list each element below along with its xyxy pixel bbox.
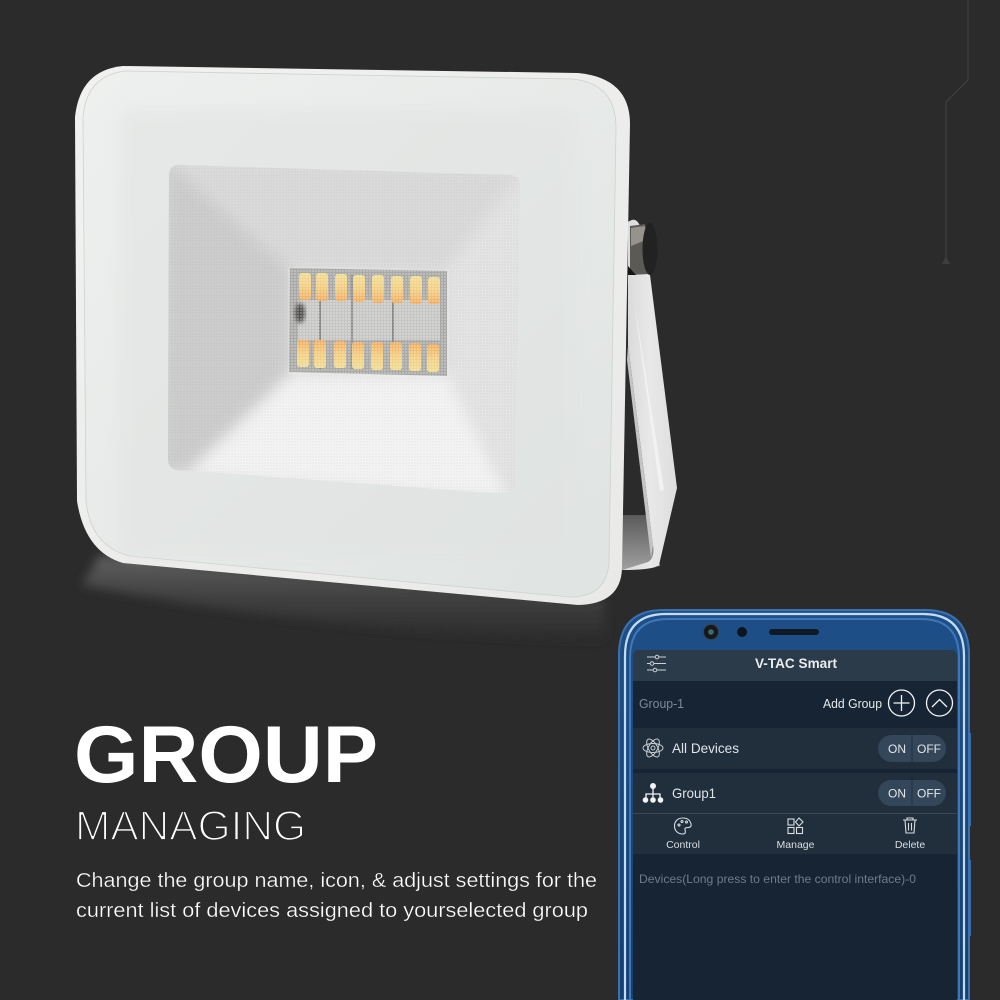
toggle bbox=[878, 735, 946, 762]
row: All Devices: All Devices bbox=[672, 740, 739, 756]
LED module bbox=[287, 266, 449, 378]
top LED row bbox=[299, 273, 440, 304]
toggle: ON bbox=[888, 742, 906, 756]
atom icon bbox=[643, 737, 663, 759]
add button bbox=[888, 690, 914, 716]
light window bbox=[160, 160, 525, 500]
frosted glass bbox=[83, 71, 616, 597]
right facet bbox=[447, 170, 525, 500]
group selector row bbox=[639, 690, 952, 716]
front camera bbox=[704, 624, 718, 640]
actions row: Delete bbox=[895, 839, 925, 851]
app title: V-TAC Smart bbox=[755, 656, 838, 671]
description text: current list of devices assigned to yourselected group bbox=[76, 900, 588, 922]
devices hint: Devices(Long press to enter the control interface)-0 bbox=[639, 872, 916, 886]
phone body bbox=[619, 610, 969, 1000]
description text bbox=[76, 870, 597, 922]
mounting bracket bbox=[622, 220, 677, 570]
app header bbox=[633, 650, 957, 681]
app screen bbox=[633, 650, 957, 1000]
bottom LED row bbox=[297, 340, 439, 372]
bolt bbox=[628, 223, 658, 275]
collapse button bbox=[926, 690, 952, 716]
toggle: OFF bbox=[917, 742, 941, 756]
floodlight lamp bbox=[75, 66, 677, 605]
LED mesh overlay bbox=[287, 266, 449, 378]
menu icon bbox=[647, 655, 666, 672]
subheading: MANAGING: MANAGING bbox=[75, 802, 306, 849]
toggle: OFF bbox=[917, 786, 941, 800]
phone edge highlight bbox=[625, 614, 964, 1000]
decorative circuit line bbox=[942, 0, 968, 264]
row: Group1 bbox=[633, 773, 957, 813]
actions row: Control bbox=[666, 839, 700, 851]
left facet bbox=[160, 160, 289, 470]
actions row bbox=[633, 813, 957, 854]
bottom facet bbox=[185, 375, 510, 500]
icon: manage grid bbox=[788, 818, 803, 834]
actions row: Manage bbox=[777, 839, 815, 851]
icon: trash bbox=[903, 818, 917, 833]
row: All Devices bbox=[633, 728, 957, 769]
phone inner edge bbox=[630, 619, 959, 1000]
toggle: ON bbox=[888, 786, 906, 800]
top facet bbox=[165, 160, 525, 268]
smartphone bbox=[619, 610, 971, 1000]
toggle bbox=[878, 780, 946, 806]
group selector row: Group-1 bbox=[639, 697, 684, 711]
icon: palette bbox=[674, 818, 691, 834]
description text: Change the group name, icon, & adjust settings for the bbox=[76, 870, 597, 892]
lamp frame bbox=[75, 66, 630, 605]
glass inner band bbox=[118, 108, 578, 558]
row: Group1: Group1 bbox=[672, 785, 716, 801]
floor reflection bbox=[82, 555, 605, 640]
speaker bbox=[769, 629, 819, 635]
phone side buttons bbox=[968, 733, 971, 936]
mesh texture bbox=[160, 160, 525, 500]
hierarchy icon bbox=[643, 783, 663, 803]
soft facets bbox=[168, 166, 506, 494]
group selector row: Add Group bbox=[823, 697, 882, 711]
heading: GROUP: GROUP bbox=[74, 710, 378, 800]
sensor bbox=[737, 627, 747, 637]
